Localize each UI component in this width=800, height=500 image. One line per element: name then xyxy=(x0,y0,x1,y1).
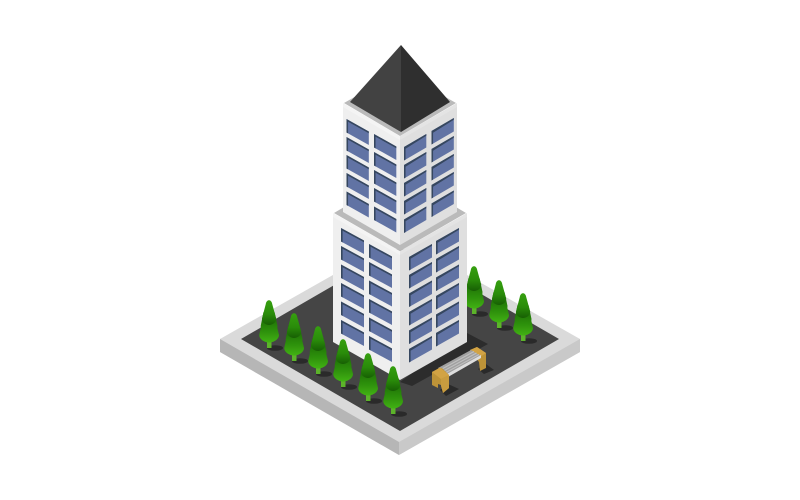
far bench end xyxy=(470,347,486,371)
asphalt plaza xyxy=(241,247,559,431)
windows upper left face xyxy=(346,119,396,232)
windows lower right face xyxy=(409,228,459,362)
tower upper block xyxy=(343,71,457,245)
pyramid roof xyxy=(350,45,450,132)
near bench end xyxy=(432,368,449,393)
bench xyxy=(432,347,494,396)
building shadow xyxy=(400,333,488,386)
bench shadows xyxy=(440,384,459,396)
bench seat xyxy=(438,350,481,375)
ground platform xyxy=(220,237,580,455)
upper cornice xyxy=(344,71,456,136)
windows upper right face xyxy=(404,118,454,233)
tower lower block xyxy=(333,174,467,380)
trees: back right row xyxy=(464,266,537,344)
windows lower left face xyxy=(341,228,392,362)
lower cornice xyxy=(334,174,466,251)
trees: front left row xyxy=(259,300,407,417)
